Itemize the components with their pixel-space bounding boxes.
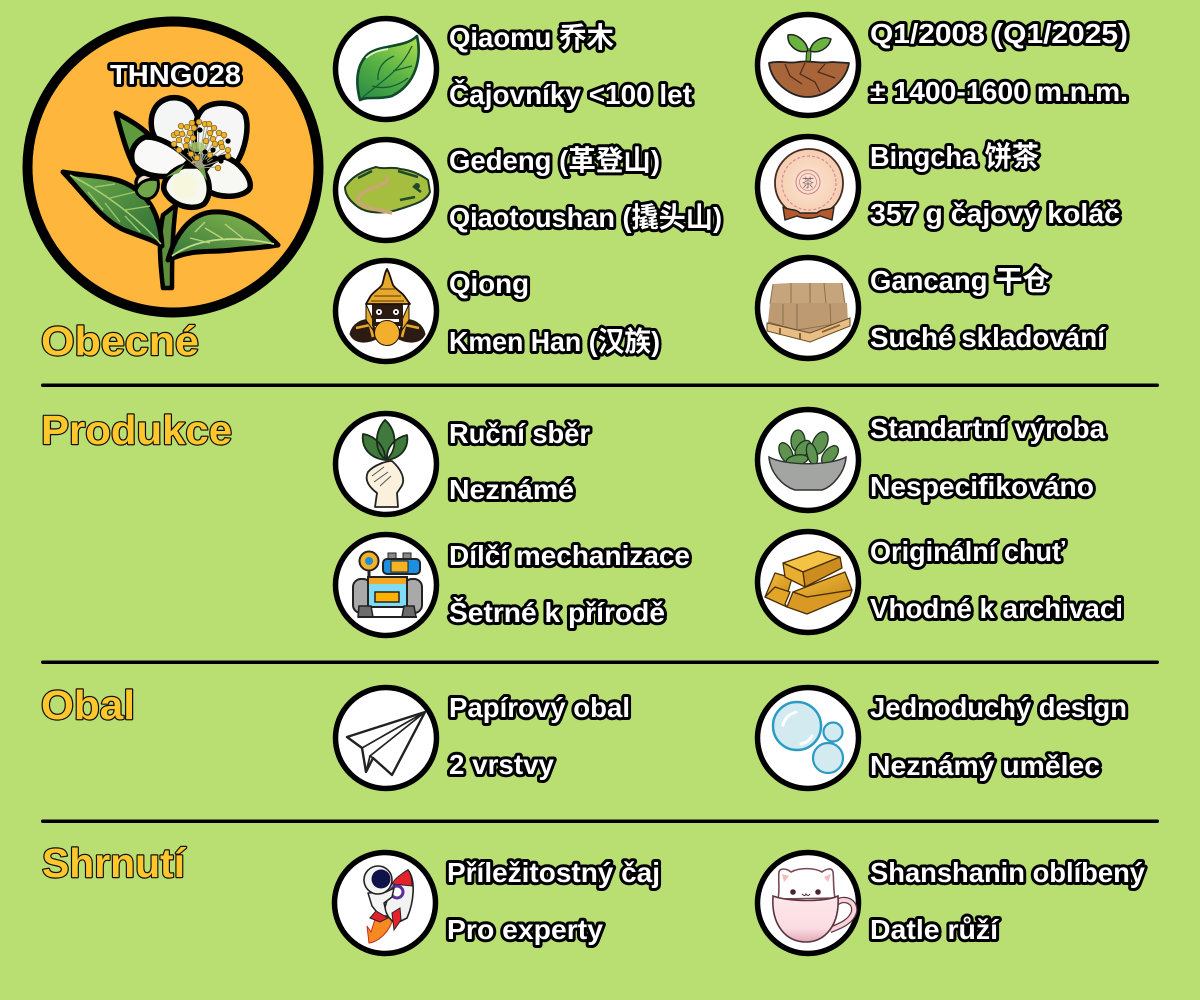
icon: bubbles (758, 688, 858, 788)
icon: tea cake on stand (758, 136, 858, 238)
label: Qiaomu 乔木 (449, 22, 614, 53)
label: Neznámý umělec (870, 750, 1100, 781)
label: 2 vrstvy (449, 749, 554, 780)
label: Jednoduchý design (870, 692, 1127, 723)
icon: boxes on pallet (758, 258, 858, 358)
item: wrapper (336, 688, 630, 788)
icon: cat in cup (758, 852, 858, 954)
label: Q1/2008 (Q1/2025) (870, 18, 1128, 49)
icon: bowl of leaves (758, 410, 858, 510)
icon: astronaut on rocket (334, 852, 436, 954)
icon: gold bars (758, 532, 858, 632)
label: Dílčí mechanizace (449, 540, 690, 571)
item: storage (758, 258, 1106, 358)
label: Suché skladování (870, 322, 1106, 353)
label: Příležitostný čaj (447, 857, 660, 888)
item: design (758, 688, 1127, 788)
item: harvest date and altitude (758, 14, 1128, 116)
label: Kmen Han (汉族) (449, 326, 660, 357)
heading: Obecné: Obecné (41, 318, 199, 364)
item: ethnic group (336, 260, 660, 362)
label: Pro experty (447, 914, 603, 945)
item: processing (758, 410, 1105, 510)
badge: tea flower emblem (28, 22, 318, 312)
item: mountain (336, 140, 722, 240)
icon: temple guardian (336, 260, 436, 362)
item: occasion (334, 852, 660, 954)
label: ± 1400-1600 m.n.m. (870, 76, 1128, 107)
label: 357 g čajový koláč (870, 198, 1120, 229)
label: Bingcha 饼茶 (870, 141, 1039, 172)
label: Čajovníky <100 let (449, 78, 692, 110)
item: tree type (336, 18, 692, 120)
label: Nespecifikováno (870, 471, 1094, 502)
icon: machine (336, 534, 436, 636)
badge code: THNG028 (110, 59, 241, 90)
item: flavour (758, 532, 1123, 632)
label: Shanshanin oblíbený (870, 857, 1145, 888)
item: recommendation (758, 852, 1145, 954)
label: Qiong (449, 268, 529, 299)
icon: leaf (336, 18, 436, 120)
item: tea cake form (758, 136, 1120, 238)
heading: Produkce: Produkce (41, 407, 232, 453)
icon: mountain landscape (336, 140, 436, 240)
item: mechanization (336, 534, 690, 636)
stamens (174, 122, 228, 168)
label: Neznámé (449, 474, 574, 505)
label: Standartní výroba (870, 413, 1105, 444)
heading: Shrnutí: Shrnutí (42, 840, 187, 886)
heading: Obal: Obal (41, 682, 135, 728)
label: Originální chuť (870, 536, 1066, 567)
label: Ruční sběr (449, 418, 590, 449)
icon: paper plane (336, 688, 436, 788)
label: Gedeng (革登山) (449, 145, 660, 176)
label: Datle růží (870, 914, 999, 945)
label: Papírový obal (449, 692, 630, 723)
item: hand picking (336, 414, 590, 514)
icon: hand holding leaves (336, 414, 436, 514)
label: Gancang 干仓 (870, 265, 1050, 296)
label: Šetrné k přírodě (449, 596, 665, 628)
icon: tea cake on stand: 茶 (802, 175, 814, 190)
icon: tea flower (63, 98, 278, 288)
icon: sprout in soil (758, 14, 858, 116)
label: Qiaotoushan (撬头山) (449, 202, 722, 233)
label: Vhodné k archivaci (870, 593, 1123, 624)
